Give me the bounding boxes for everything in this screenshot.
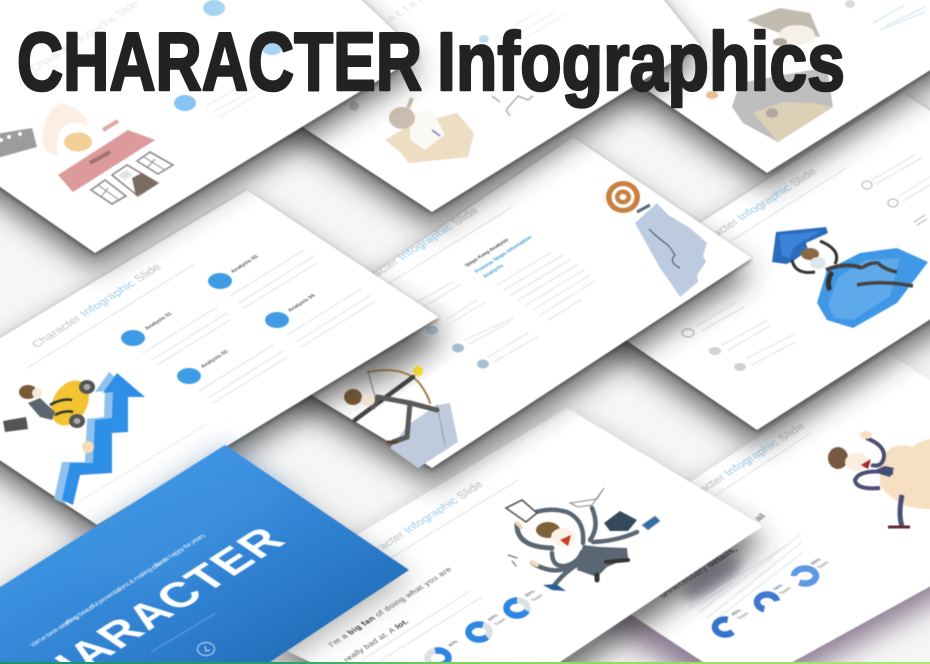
donut chart: 90% — [794, 557, 831, 584]
icon: hand with coin — [42, 103, 118, 155]
item: Analysis 01 — [121, 307, 230, 365]
text block: steps: Analysis — [482, 264, 506, 279]
icon: man bursting from box — [349, 10, 565, 163]
item: Analysis 03 — [208, 250, 317, 308]
panel: multitasking character slide — [285, 408, 765, 664]
donut chart: 60%: 60% — [487, 613, 501, 622]
panel: four analysis slide with arrow — [0, 190, 439, 540]
icon: archer on cliff — [344, 366, 458, 468]
donut chart: 78% — [757, 583, 793, 610]
heading: faded slide title: Character Infographic Slide — [27, 0, 143, 74]
icon: rising blue arrow — [54, 372, 145, 505]
text block: big fan statement: I'm a big fan of doing what you are — [326, 566, 454, 648]
text block: big fan statement: really bad at. A lot. — [341, 618, 411, 663]
donut chart: 40% — [428, 639, 461, 664]
donut chart: 45%: Team — [736, 611, 751, 621]
panel: blue cover slide — [0, 445, 411, 664]
icon: many-armed businessman — [506, 488, 660, 591]
panel: caped hero character slide — [573, 93, 930, 446]
heading: slide title: racter Infographic Slide — [372, 479, 487, 554]
icon: film strip — [0, 128, 37, 160]
icon list: features — [682, 155, 930, 371]
text block: intro: unnecessary details, — [656, 545, 739, 599]
heading: slide title: acter Infographic Slide — [369, 205, 482, 279]
donut chart: 90%: Team — [816, 560, 831, 570]
heading: slide title: acter Infographic Slide — [709, 166, 821, 239]
icon list: features — [417, 282, 537, 368]
donut chart: 60%: Team — [493, 617, 508, 627]
donut chart: 45%: 45% — [730, 608, 744, 617]
donut chart: 80%: 80% — [524, 589, 538, 598]
item: Analysis 04 — [265, 289, 374, 347]
text block: steps — [464, 235, 595, 320]
icon: target on rock — [606, 181, 707, 297]
icon: circled arrow — [198, 642, 214, 656]
item: Analysis 02 — [177, 345, 286, 403]
item: Analysis 03: Analysis 03 — [230, 254, 260, 274]
donut chart: 80%: Team — [530, 593, 545, 603]
text block: steps: Process Steps Information — [474, 235, 534, 274]
icon: house — [58, 130, 173, 204]
item: Analysis 04: Analysis 04 — [287, 293, 317, 313]
panel: faded slide with man in box — [200, 0, 700, 227]
title: CHARACTER — [17, 15, 422, 108]
panel: slide with big hand character — [554, 352, 930, 664]
donut chart: 40%: 40% — [447, 639, 461, 648]
donut chart: 60% — [468, 613, 508, 640]
item: Analysis 02: Analysis 02 — [200, 349, 230, 369]
item: Analysis 01: Analysis 01 — [144, 311, 174, 331]
panel: target and archer slide — [250, 137, 752, 484]
title — [17, 15, 845, 108]
panel: faded slide with sack character — [560, 0, 930, 188]
panel: faded slide with house — [0, 0, 420, 268]
text block: cover tagline: We've been crafting beautiful presentations & making clients happy for years. — [29, 532, 209, 648]
text block: steps: Steps Keep Analysis — [464, 238, 511, 268]
title: Infographics — [437, 15, 845, 108]
donut chart: 90%: 90% — [810, 557, 824, 566]
text block: faded captions — [845, 0, 925, 30]
icon: man held by giant hand — [828, 431, 930, 527]
text block: intro: ng all — [741, 512, 768, 529]
icon: man with sack — [706, 8, 833, 142]
heading: slide title: racter Infographic Slide — [692, 421, 809, 497]
donut chart: 78%: Team — [778, 586, 793, 596]
donut chart: 45% — [715, 608, 751, 634]
text block: intro — [656, 432, 812, 621]
item: faded blue circles — [174, 0, 283, 118]
heading: slide title: Character Infographic Slide — [29, 262, 165, 350]
donut chart: 80% — [506, 589, 545, 616]
icon: man on yellow scooter — [3, 374, 97, 432]
donut chart: 78%: 78% — [772, 583, 786, 592]
text block: big fan statement — [326, 566, 482, 664]
icon: caped hero with arrow — [772, 227, 928, 328]
